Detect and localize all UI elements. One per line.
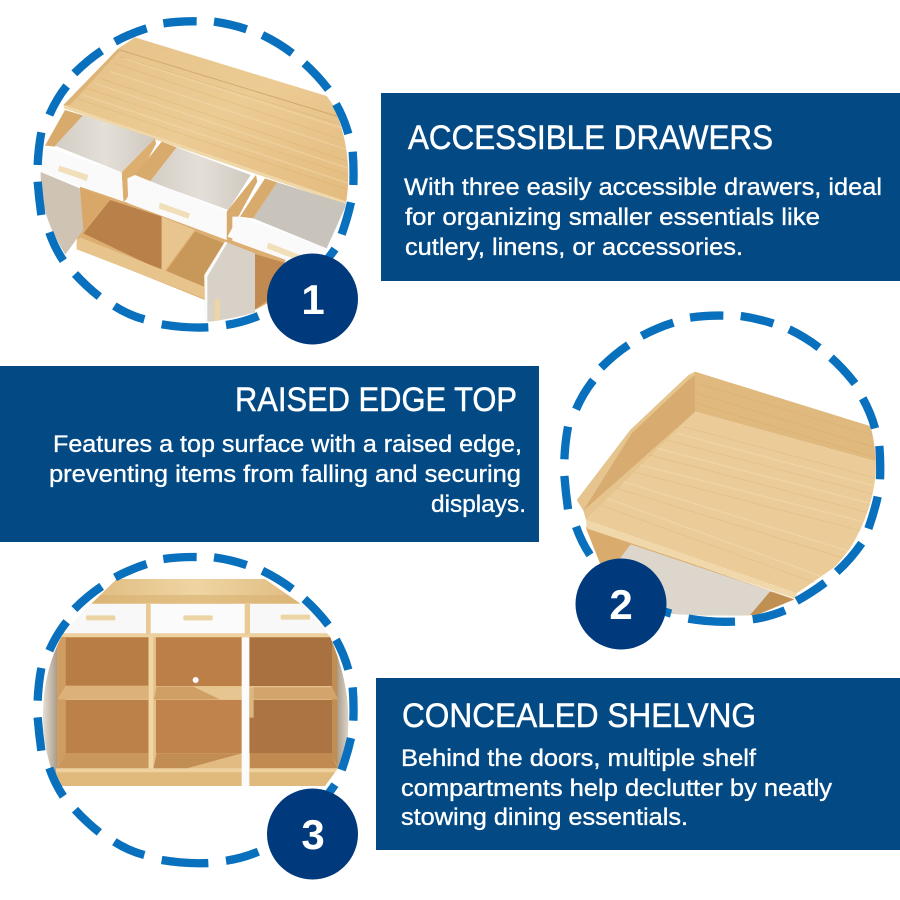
- image: open drawers sideboard: [40, 37, 353, 322]
- top surface: [63, 37, 353, 207]
- panel: raised edge top: [0, 366, 539, 542]
- text block: concealed shelving description: stowing dining essentials.: [401, 804, 688, 831]
- drawer 3: [232, 178, 347, 265]
- right door: [204, 242, 255, 322]
- image: raised edge top close-up: [577, 372, 883, 620]
- shelf compartments: [56, 634, 339, 786]
- heading: concealed shelving: CONCEALED SHELVNG: [402, 697, 756, 735]
- drawer 1: [41, 110, 156, 202]
- text block: raised edge description: [49, 431, 526, 518]
- drawers: [62, 604, 330, 636]
- dashed ring 1: [38, 21, 354, 328]
- badge 3: [267, 788, 358, 880]
- heading: raised edge top: RAISED EDGE TOP: [235, 381, 517, 419]
- left door: [40, 172, 83, 255]
- text block: raised edge description: preventing items from falling and securing: [49, 461, 521, 488]
- heading: accessible drawers: ACCESSIBLE DRAWERS: [408, 119, 773, 157]
- panel: concealed shelving: [376, 678, 900, 850]
- text block: concealed shelving description: compartments help declutter by neatly: [401, 775, 832, 802]
- badge 1: 1: [301, 276, 325, 323]
- open door: [242, 637, 254, 788]
- left raised wall: [577, 372, 696, 520]
- text block: accessible drawers description: for organizing smaller essentials like: [405, 204, 820, 231]
- badge 2: [576, 558, 666, 650]
- badge 1: [267, 254, 358, 344]
- shelf surface: [586, 412, 883, 593]
- dashed ring 2: [564, 316, 880, 622]
- text block: accessible drawers description: cutlery, linens, or accessories.: [405, 234, 743, 261]
- text block: concealed shelving description: Behind the doors, multiple shelf: [401, 745, 756, 772]
- text block: accessible drawers description: With three easily accessible drawers, ideal: [404, 174, 882, 201]
- back raised wall: [695, 372, 883, 463]
- wood top: [87, 579, 303, 603]
- drawer 2: [127, 142, 257, 240]
- panel: accessible drawers: [381, 93, 900, 281]
- text block: concealed shelving description: [401, 745, 832, 831]
- dashed ring 3: [38, 557, 354, 863]
- image: concealed shelves front view: [40, 579, 353, 788]
- text block: raised edge description: Features a top surface with a raised edge,: [53, 431, 522, 458]
- text block: raised edge description: displays.: [431, 491, 526, 518]
- text block: accessible drawers description: [404, 174, 882, 261]
- badge 3: 3: [301, 811, 325, 858]
- badge 2: 2: [609, 581, 633, 628]
